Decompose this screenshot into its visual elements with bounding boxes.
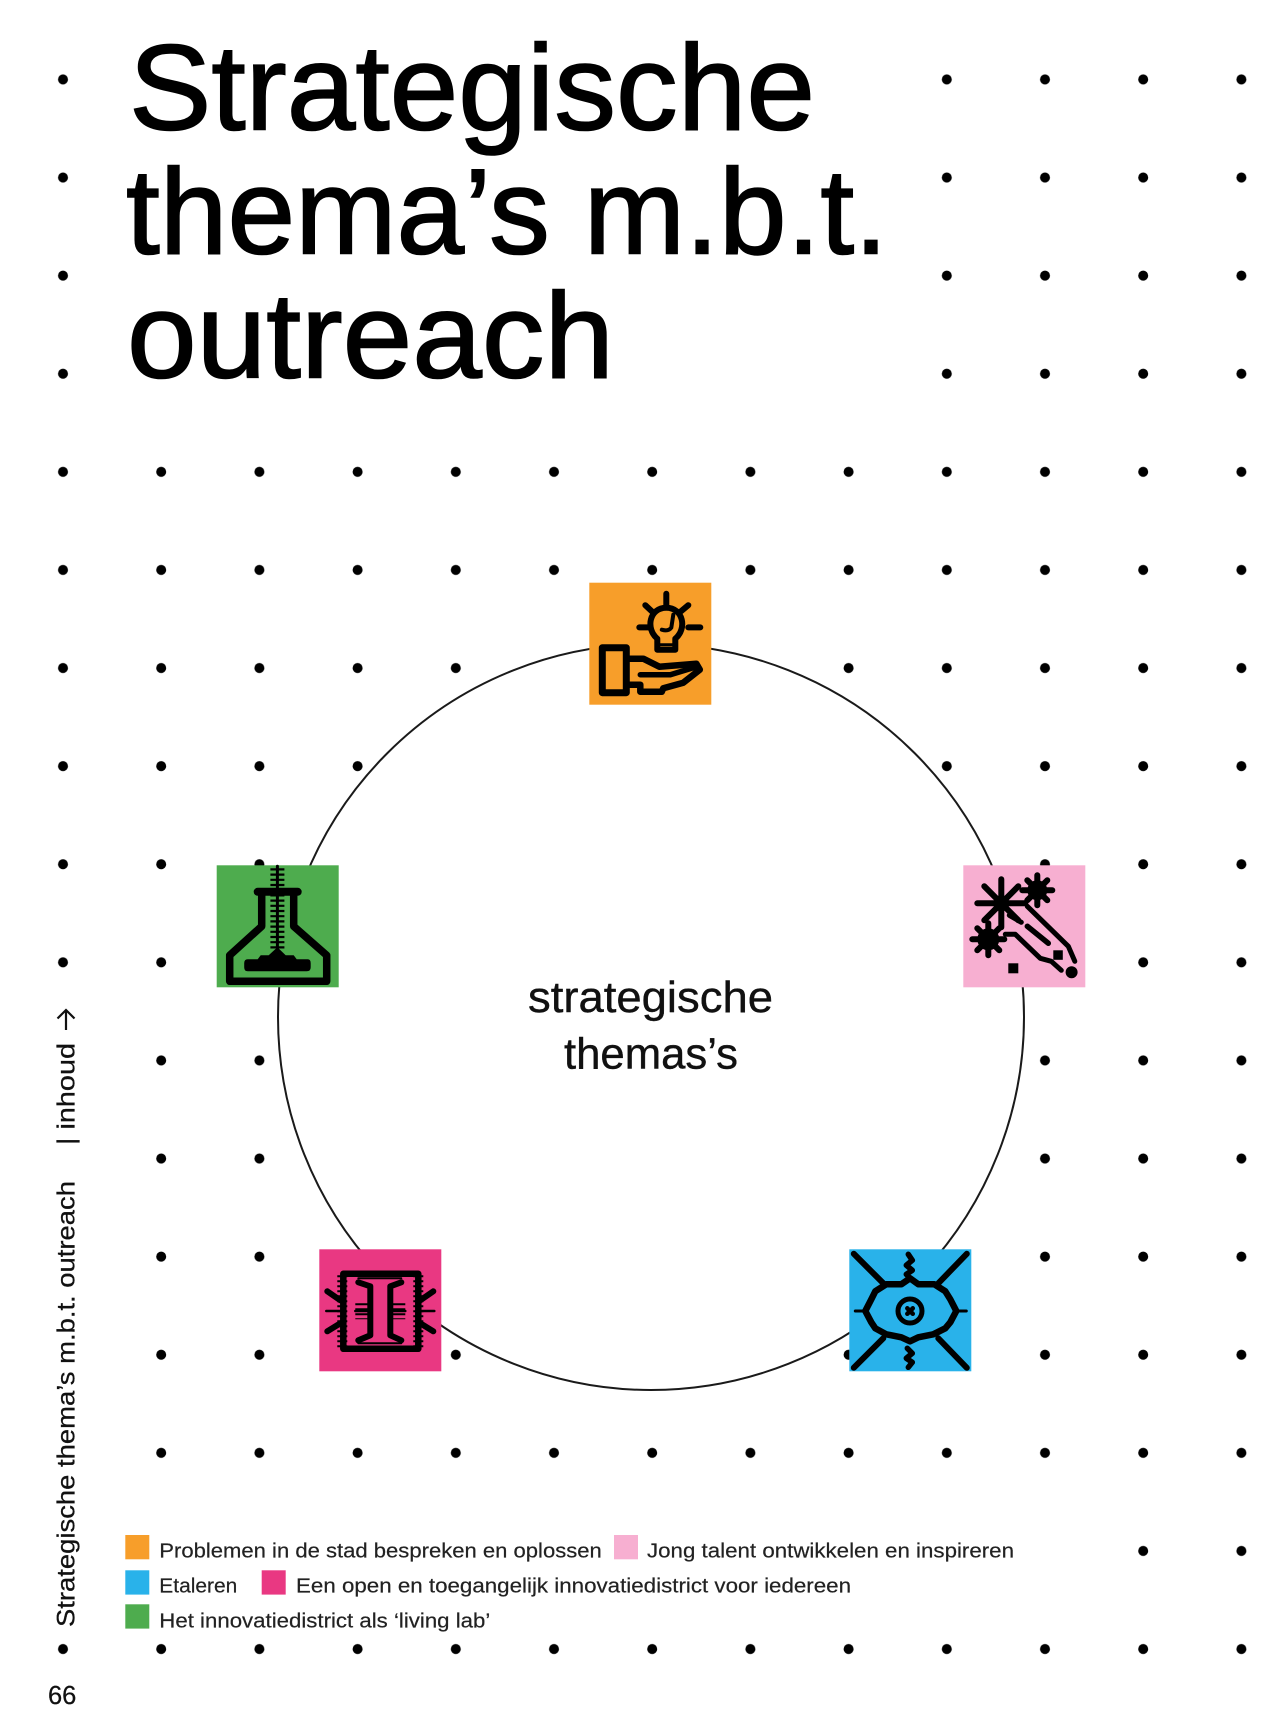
- circle diagram ring: [278, 644, 1024, 1390]
- legend: [125, 1535, 1014, 1633]
- page number: 66: [48, 1682, 76, 1710]
- side navigation text: | inhoud: [52, 1043, 80, 1145]
- icon: framed i-beam: [319, 1249, 441, 1371]
- legend item: green: Het innovatiedistrict als ‘living lab’: [159, 1610, 490, 1633]
- legend item: orange: Problemen in de stad bespreken en oplossen: [159, 1540, 602, 1562]
- legend item: green: [125, 1604, 490, 1633]
- centre label: [528, 973, 773, 1078]
- legend item: pink: Jong talent ontwikkelen en inspireren: [647, 1540, 1014, 1562]
- title: [126, 20, 888, 404]
- arrow: up to contents: [58, 1010, 74, 1030]
- side navigation text: Strategische thema’s m.b.t. outreach: [52, 1181, 80, 1627]
- icon: sparkling wand: [963, 865, 1085, 987]
- title: Strategische: [129, 20, 815, 156]
- centre label: themas’s: [564, 1030, 738, 1078]
- icon: hand with light bulb: [589, 583, 711, 705]
- legend item: blue: Etaleren: [159, 1575, 237, 1598]
- title: outreach: [127, 268, 614, 404]
- legend item: blue: [125, 1570, 237, 1598]
- icon: eye with rays: [849, 1249, 971, 1371]
- side navigation text: [52, 1043, 80, 1627]
- legend item: magenta: Een open en toegangelijk innovatiedistrict voor iedereen: [296, 1575, 851, 1598]
- title: thema’s m.b.t.: [126, 144, 888, 280]
- icon: flask: [217, 865, 339, 987]
- centre label: strategische: [528, 973, 773, 1022]
